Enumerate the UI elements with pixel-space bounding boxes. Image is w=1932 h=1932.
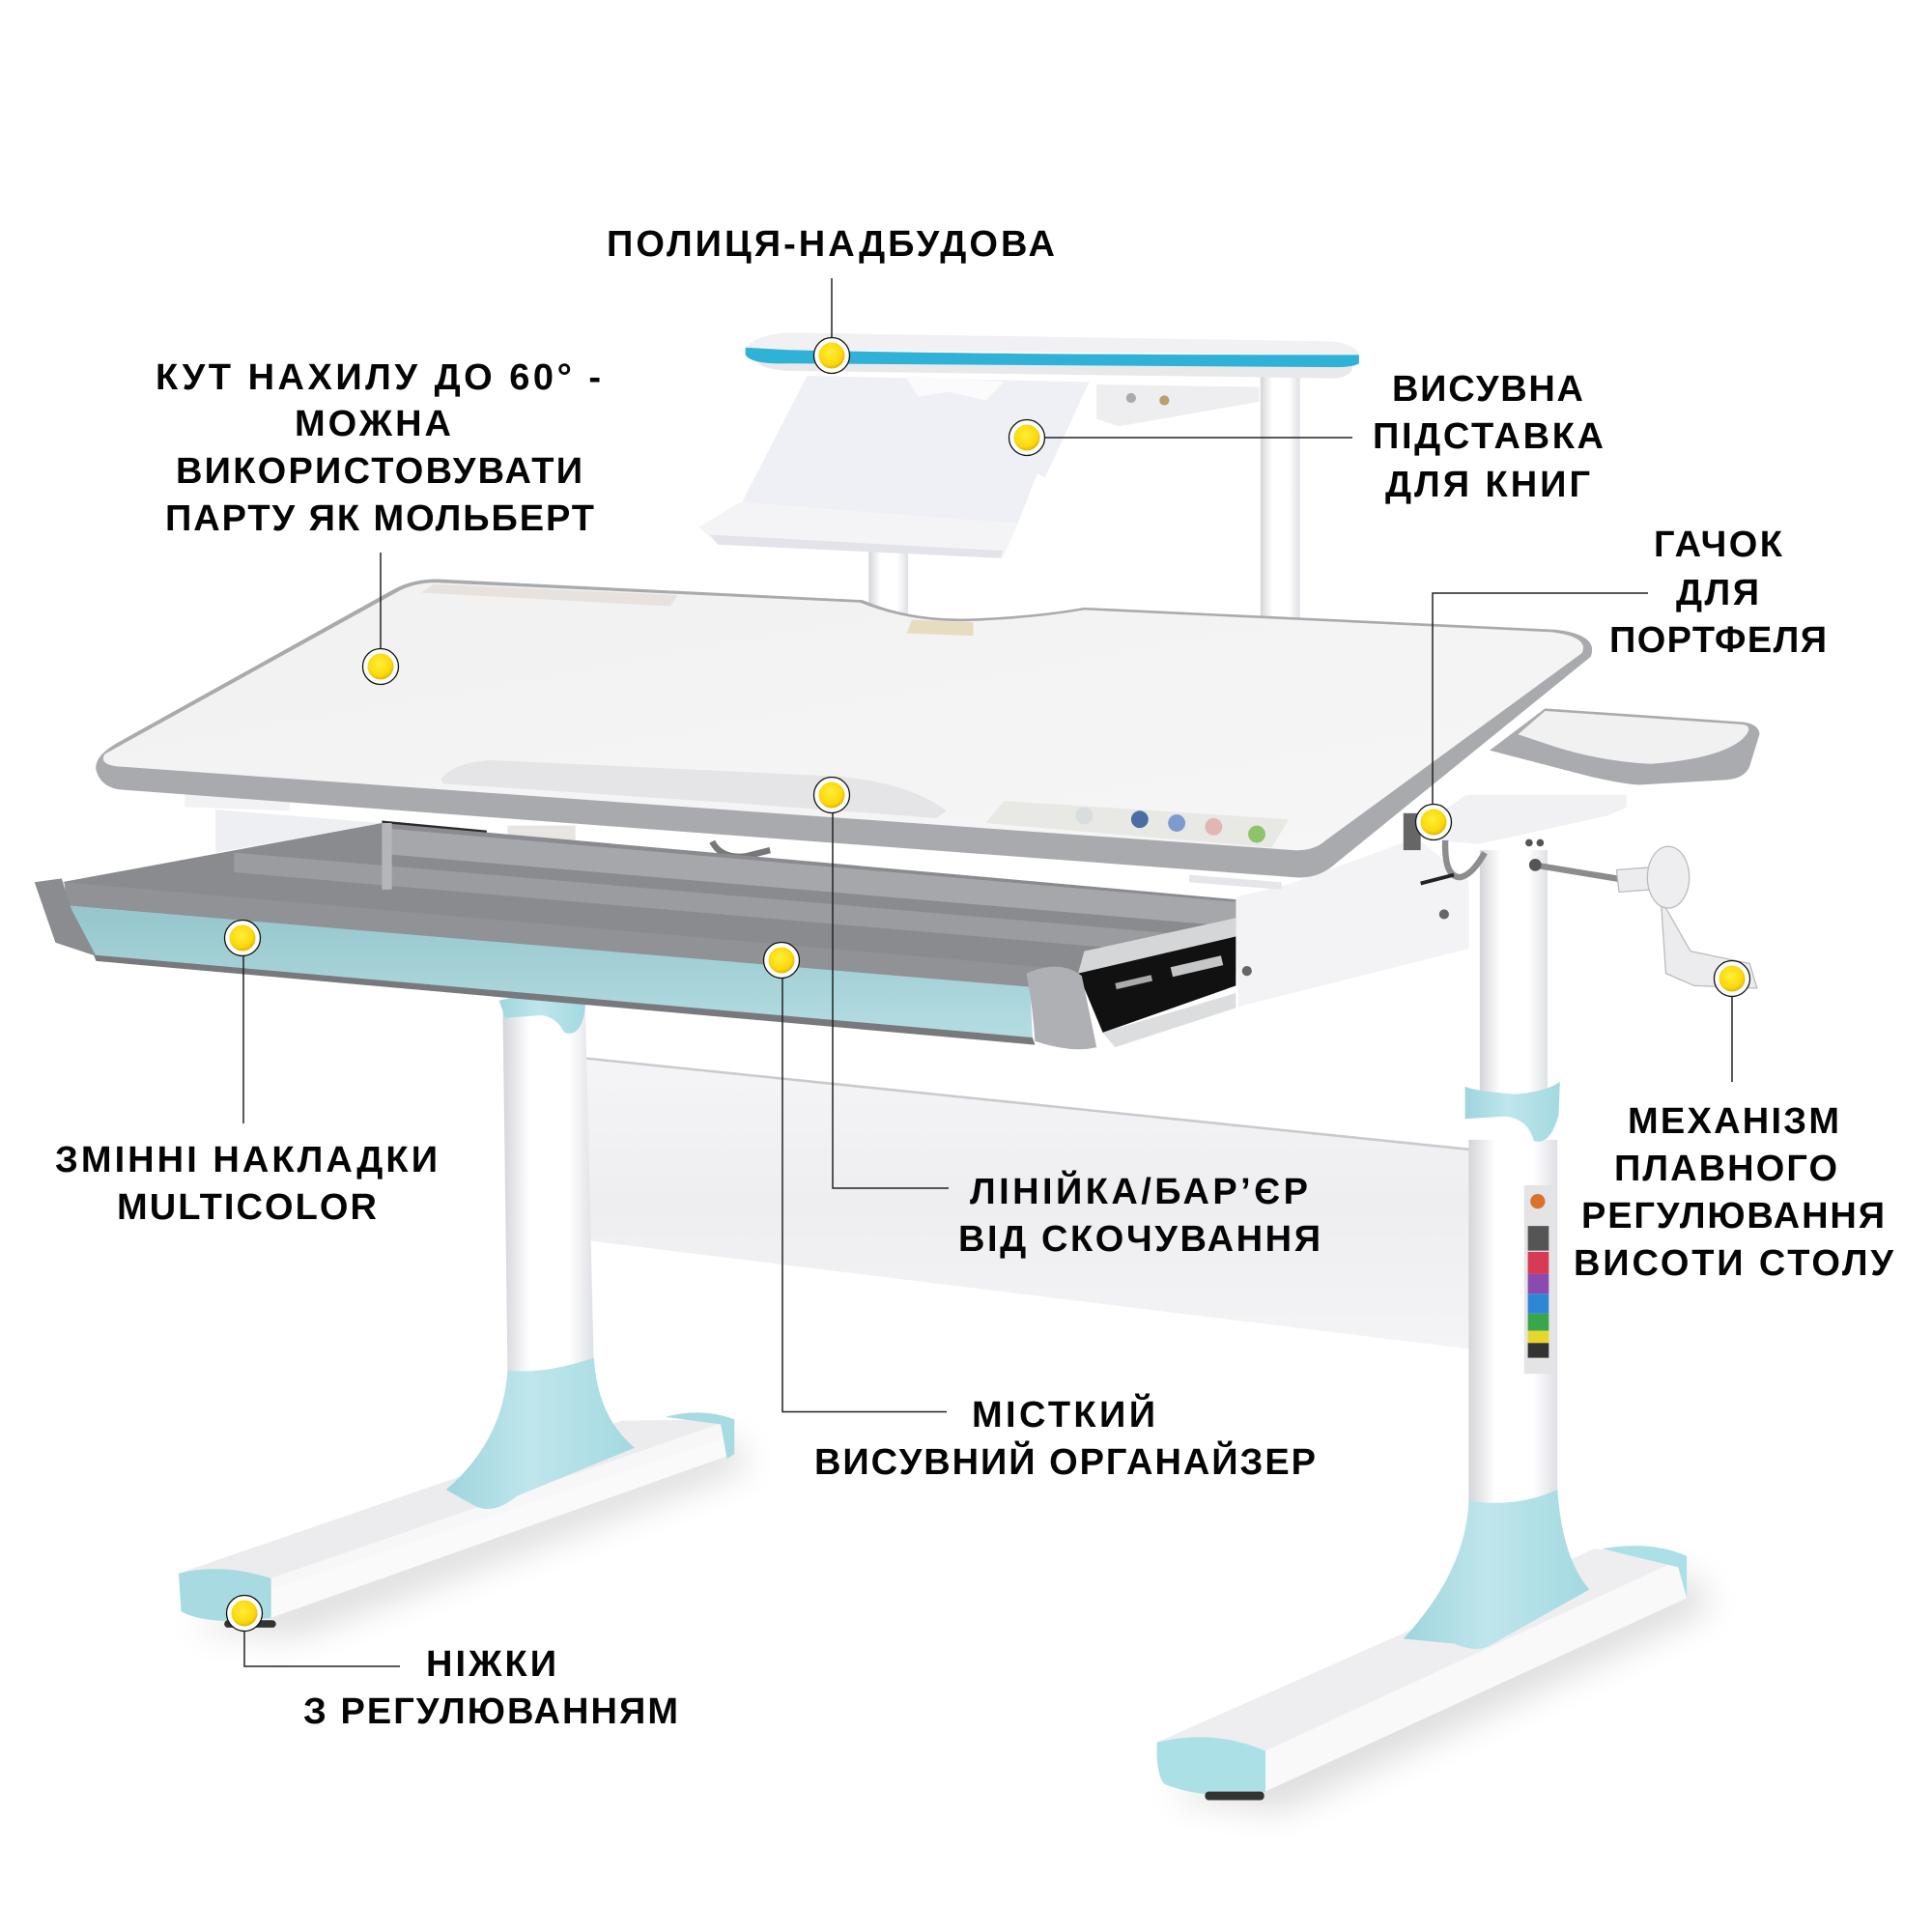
drawer xyxy=(35,823,1236,1049)
marker: overlays xyxy=(224,920,261,956)
shelf xyxy=(746,332,1359,379)
book stand xyxy=(698,376,1260,558)
marker: organizer xyxy=(763,943,800,978)
label: feet: НІЖКИ xyxy=(426,1644,556,1685)
label: crank mechanism xyxy=(1574,1101,1893,1284)
marker: tilt xyxy=(363,649,398,684)
marker: book stand xyxy=(1009,419,1045,456)
label: tilt angle: КУТ НАХИЛУ ДО 60° - xyxy=(156,357,601,398)
marker: shelf xyxy=(813,338,850,373)
label: book stand: ДЛЯ КНИГ xyxy=(1385,465,1590,505)
side tray xyxy=(1405,708,1759,844)
right foot xyxy=(1157,1546,1687,1801)
label: tilt angle: МОЖНА xyxy=(295,404,451,444)
label: organizer xyxy=(814,1392,1316,1483)
marker: hook xyxy=(1416,804,1451,840)
back posts xyxy=(868,370,1300,622)
marker: crank xyxy=(1714,960,1750,997)
desktop xyxy=(96,579,1592,877)
label: hook xyxy=(1609,525,1827,661)
label: tilt angle: ВИКОРИСТОВУВАТИ xyxy=(176,451,582,492)
desk illustration xyxy=(35,332,1759,1811)
label: overlays xyxy=(55,1140,438,1228)
label: overlays: ЗМІННІ НАКЛАДКИ xyxy=(55,1140,438,1180)
label: feet: З РЕГУЛЮВАННЯМ xyxy=(303,1691,678,1732)
label: book stand: ВИСУВНА xyxy=(1392,369,1583,410)
label: hook: ПОРТФЕЛЯ xyxy=(1609,620,1827,661)
crossbar panel xyxy=(586,1057,1471,1350)
label: hook: ГАЧОК xyxy=(1654,525,1783,565)
label: ruler xyxy=(958,1169,1321,1260)
label: feet xyxy=(303,1644,678,1732)
left leg xyxy=(446,994,635,1509)
ruler xyxy=(441,760,947,818)
height sticker xyxy=(1524,1185,1552,1374)
right leg xyxy=(1404,850,1589,1649)
label: crank mechanism: МЕХАНІЗМ xyxy=(1628,1101,1839,1142)
label: tilt angle xyxy=(156,357,601,539)
hook xyxy=(1404,813,1485,884)
label: shelf: ПОЛИЦЯ-НАДБУДОВА xyxy=(607,224,1055,265)
label: organizer: МІСТКИЙ xyxy=(972,1392,1155,1435)
certificate sticker xyxy=(985,801,1289,848)
tool sticker xyxy=(421,584,678,607)
under-desk bracket xyxy=(185,793,1468,1007)
label: overlays: MULTICOLOR xyxy=(117,1187,377,1228)
label: organizer: ВИСУВНИЙ ОРГАНАЙЗЕР xyxy=(814,1439,1316,1483)
crank handle xyxy=(1525,839,1757,988)
label: book stand xyxy=(1373,369,1604,505)
marker: feet xyxy=(226,1596,263,1631)
drawer rail xyxy=(1078,918,1236,1047)
label: ruler: ЛІНІЙКА/БАР’ЄР xyxy=(970,1169,1308,1212)
label: hook: ДЛЯ xyxy=(1676,573,1759,613)
label: crank mechanism: ВИСОТИ СТОЛУ xyxy=(1574,1243,1893,1284)
label: crank mechanism: РЕГУЛЮВАННЯ xyxy=(1581,1196,1885,1236)
label: book stand: ПІДСТАВКА xyxy=(1373,416,1604,457)
leader lines xyxy=(243,278,1732,1666)
label: ruler: ВІД СКОЧУВАННЯ xyxy=(958,1219,1321,1260)
label: crank mechanism: ПЛАВНОГО xyxy=(1614,1149,1837,1189)
yellow sticker xyxy=(907,620,974,636)
label: tilt angle: ПАРТУ ЯК МОЛЬБЕРТ xyxy=(165,498,594,539)
marker: ruler xyxy=(813,777,850,813)
floor shadows xyxy=(185,1435,1713,1811)
left foot xyxy=(179,1412,734,1628)
